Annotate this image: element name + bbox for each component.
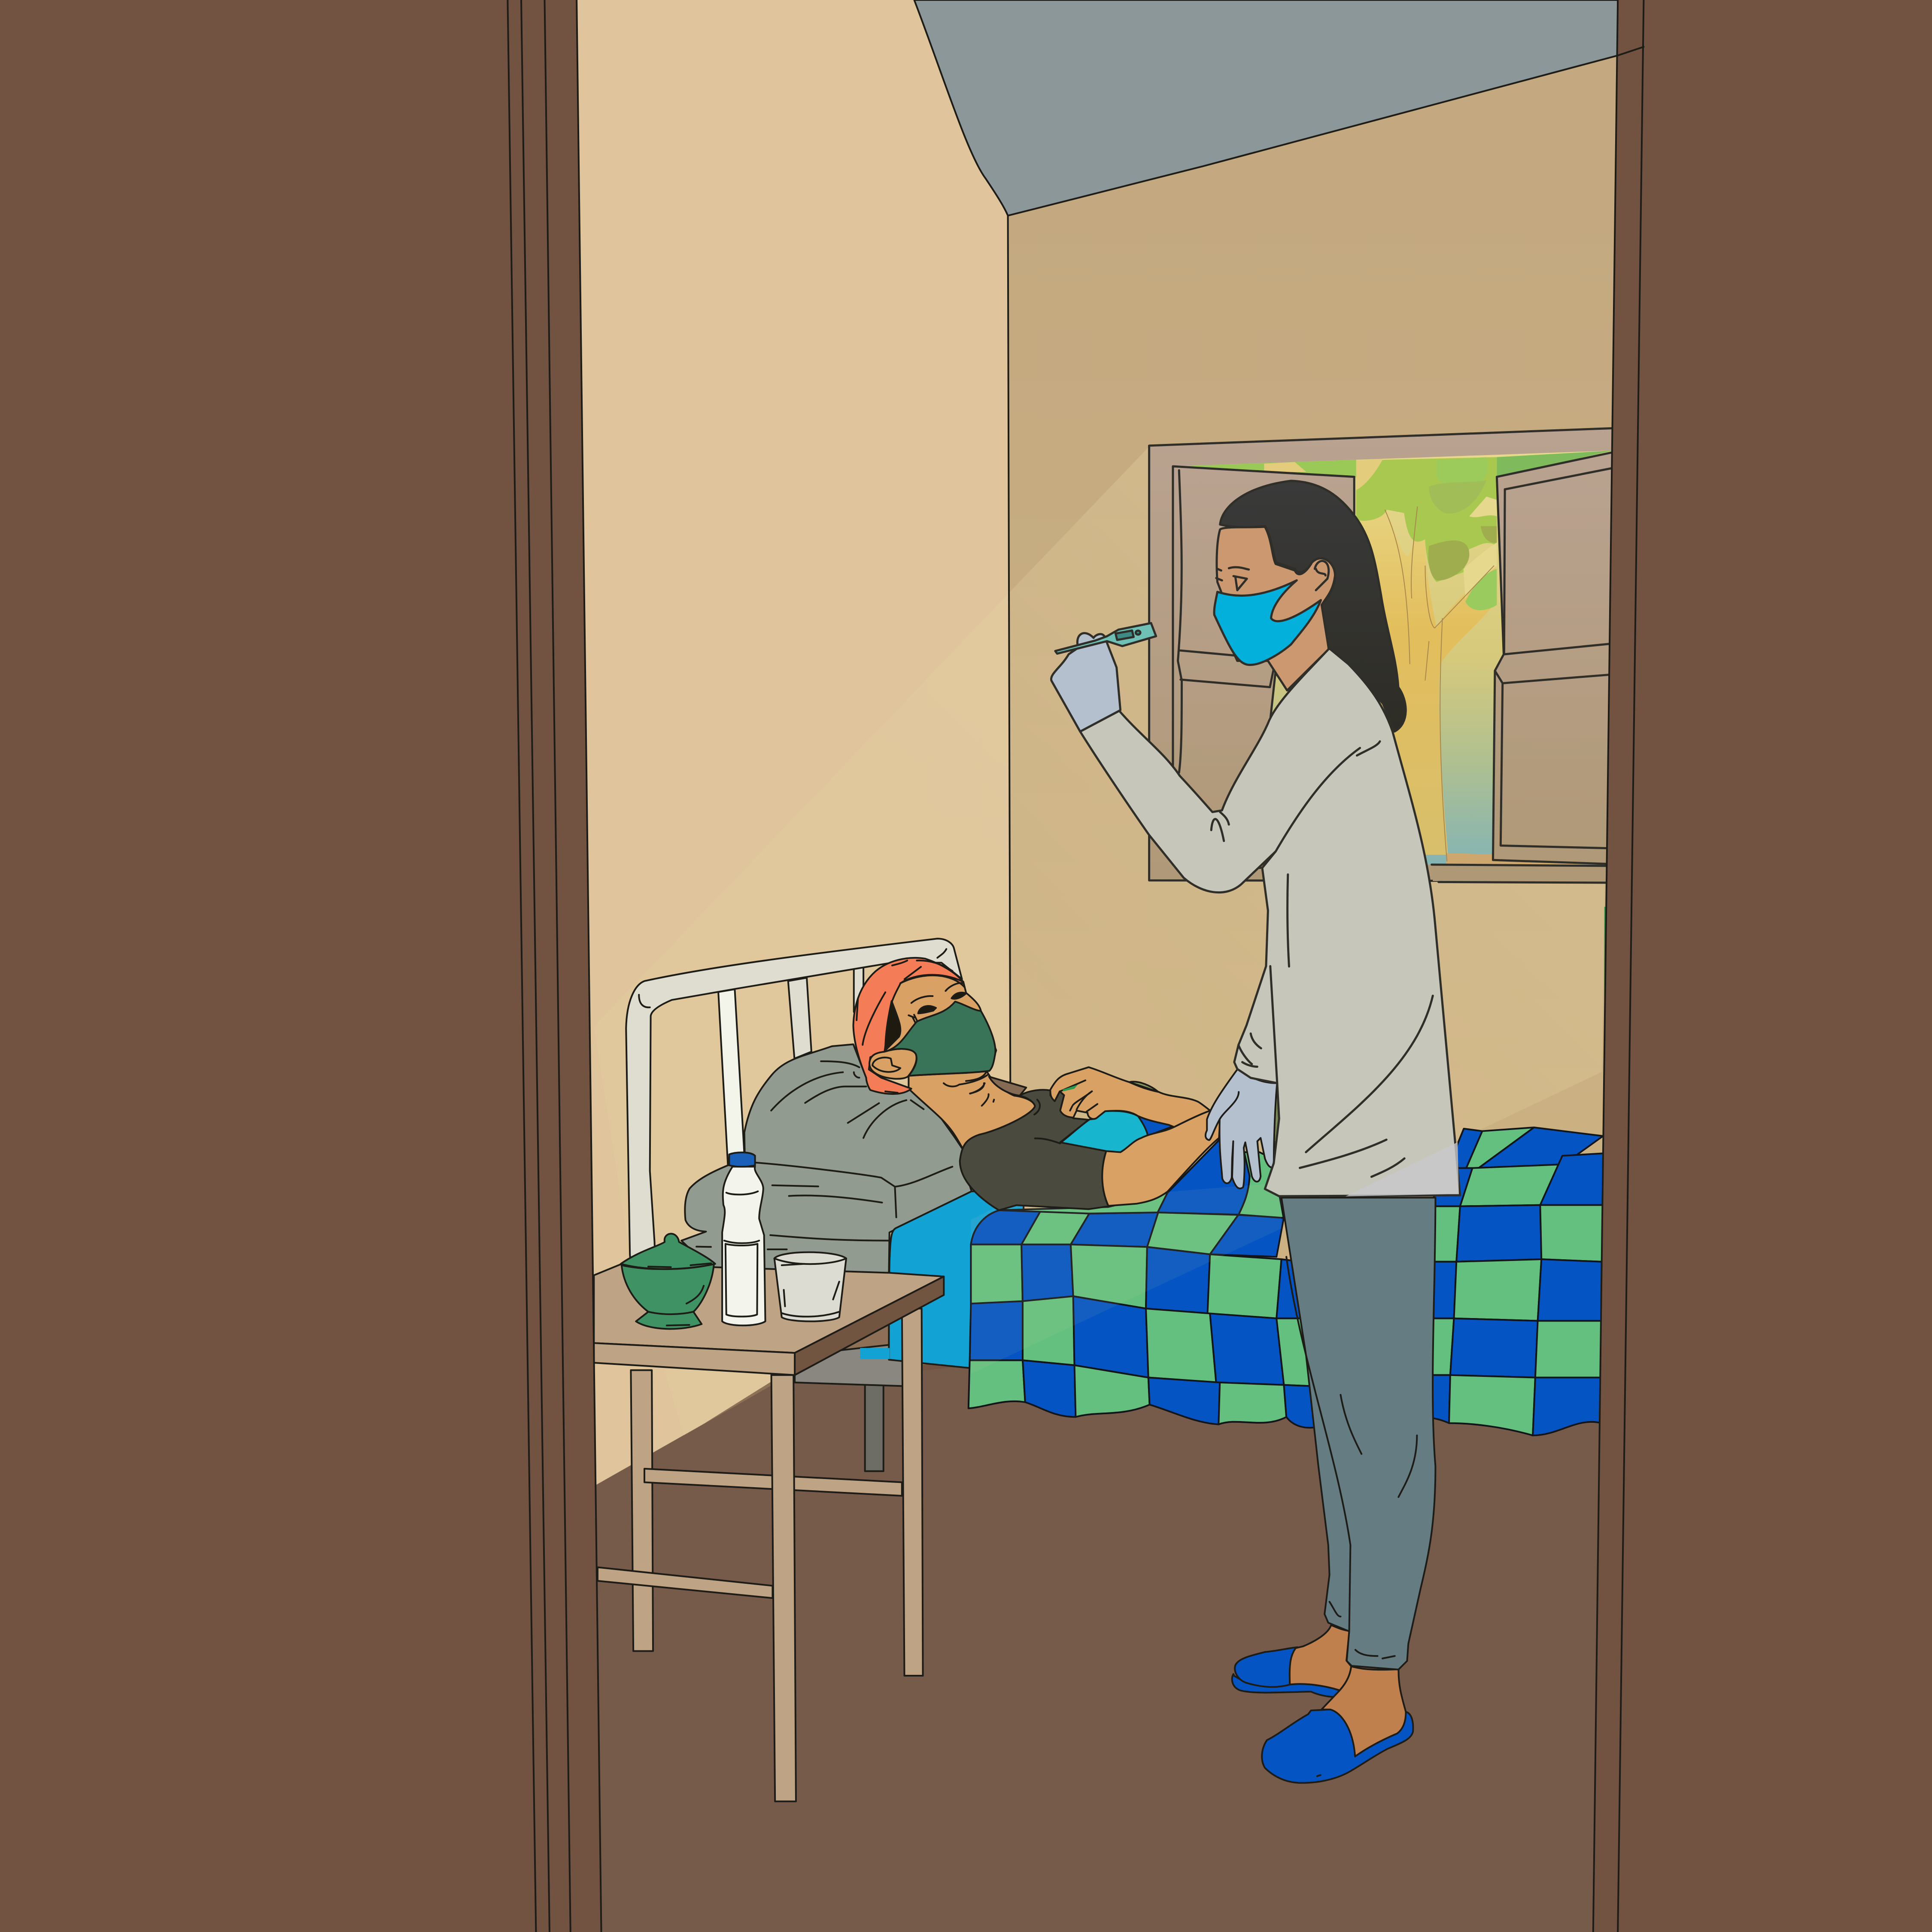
bed leg (865, 1380, 884, 1471)
green edge strip (1604, 907, 1609, 1284)
shirt creases (1034, 1100, 1060, 1143)
left door frame (0, 0, 601, 1932)
items on table (621, 1152, 846, 1329)
drinking glass (775, 1252, 846, 1321)
front foot (1321, 1666, 1406, 1756)
right door frame (1593, 0, 1932, 1932)
nurse lower hand (1206, 1069, 1280, 1188)
right blanket checks (1417, 1127, 1604, 1435)
nurse shirt (1080, 648, 1460, 1196)
rail creases (639, 949, 946, 1007)
bedside table (594, 1264, 944, 1801)
light beam on wall (594, 431, 1612, 1435)
pillow creases (696, 1061, 952, 1249)
nurse ear lines (1315, 561, 1329, 590)
nurse feet (1232, 1625, 1413, 1783)
nurse hair (1220, 481, 1406, 732)
thermometer (1055, 623, 1156, 653)
bottle cap (729, 1152, 755, 1167)
front slipper (1262, 1710, 1413, 1783)
bed (626, 907, 1609, 1471)
nurse mask (1214, 580, 1321, 665)
green strip behind glove (1272, 1140, 1279, 1163)
trouser folds (1286, 1257, 1417, 1659)
wall corner line (1008, 216, 1010, 1091)
back foot (1290, 1625, 1351, 1690)
patient (853, 958, 1220, 1210)
blanket (969, 907, 1609, 1435)
back slipper upper (1235, 1647, 1297, 1687)
left blanket checks (969, 1210, 1318, 1428)
patient headscarf (853, 958, 965, 1094)
nurse eye (1216, 567, 1249, 590)
patient head (853, 958, 996, 1094)
nurse glove upper (1051, 633, 1121, 732)
glove crease (1220, 1092, 1239, 1119)
table top (594, 1264, 944, 1353)
right shutter (1493, 452, 1613, 864)
patient torso and arms (908, 1067, 1220, 1210)
ear inner line (872, 1057, 900, 1072)
pillows (681, 1044, 972, 1273)
left shutter details (1178, 470, 1276, 773)
patient mask (884, 1002, 995, 1076)
patient collar (989, 1077, 1026, 1096)
green bowl lid (621, 1234, 715, 1269)
green cloth detail (1062, 1085, 1078, 1091)
right wall (1008, 55, 1618, 1429)
scarf folds (857, 960, 963, 1093)
olive shape behind arm (1129, 1081, 1158, 1092)
back slipper sole (1232, 1674, 1340, 1697)
glass rim (775, 1258, 846, 1317)
patient eyes (908, 983, 966, 1023)
ceiling (914, 0, 1618, 216)
bed bars (718, 966, 863, 1165)
table legs (598, 1309, 923, 1801)
window (1149, 428, 1613, 883)
patient ear (869, 1049, 917, 1079)
window frame (1149, 428, 1613, 881)
light on blanket (971, 1183, 1282, 1374)
patient dark shirt (960, 1090, 1109, 1210)
teal cushion (1060, 1111, 1148, 1153)
left wall (577, 0, 1010, 1491)
blanket upper folds (999, 1116, 1284, 1218)
nurse upper body (1051, 481, 1460, 1196)
bed head rail (626, 939, 962, 1278)
slipper mark (1317, 1775, 1321, 1776)
left shutter (1173, 466, 1354, 868)
nurse face and neck (1214, 527, 1335, 690)
bowl details (648, 1263, 711, 1325)
patient hair (885, 1001, 900, 1050)
green bowl body (622, 1264, 714, 1329)
shirt folds (1211, 741, 1433, 1177)
bottle water line (724, 1191, 759, 1317)
water bottle (722, 1166, 766, 1325)
table front edge (594, 1343, 795, 1375)
outdoor view (1173, 450, 1613, 865)
finger lines (1060, 1080, 1097, 1112)
blue sheet under table (860, 1348, 890, 1359)
nurse trousers (1282, 1198, 1435, 1670)
patient forearm (1102, 1111, 1220, 1206)
window sill (1432, 865, 1611, 883)
shirt hem tint (1346, 1142, 1459, 1197)
patient hand and upper arm (1050, 1067, 1210, 1127)
patient neck (908, 1071, 1035, 1150)
floor (596, 1365, 1602, 1932)
neck creases (966, 1071, 994, 1106)
patient face (884, 975, 996, 1076)
bed side rail (795, 1343, 905, 1386)
pants strip behind glove (1272, 1083, 1280, 1140)
nurse lower glove (1206, 1069, 1277, 1188)
neck creases upper (944, 1075, 987, 1094)
table side (795, 1276, 944, 1375)
blue bed sheet (889, 1191, 1024, 1368)
